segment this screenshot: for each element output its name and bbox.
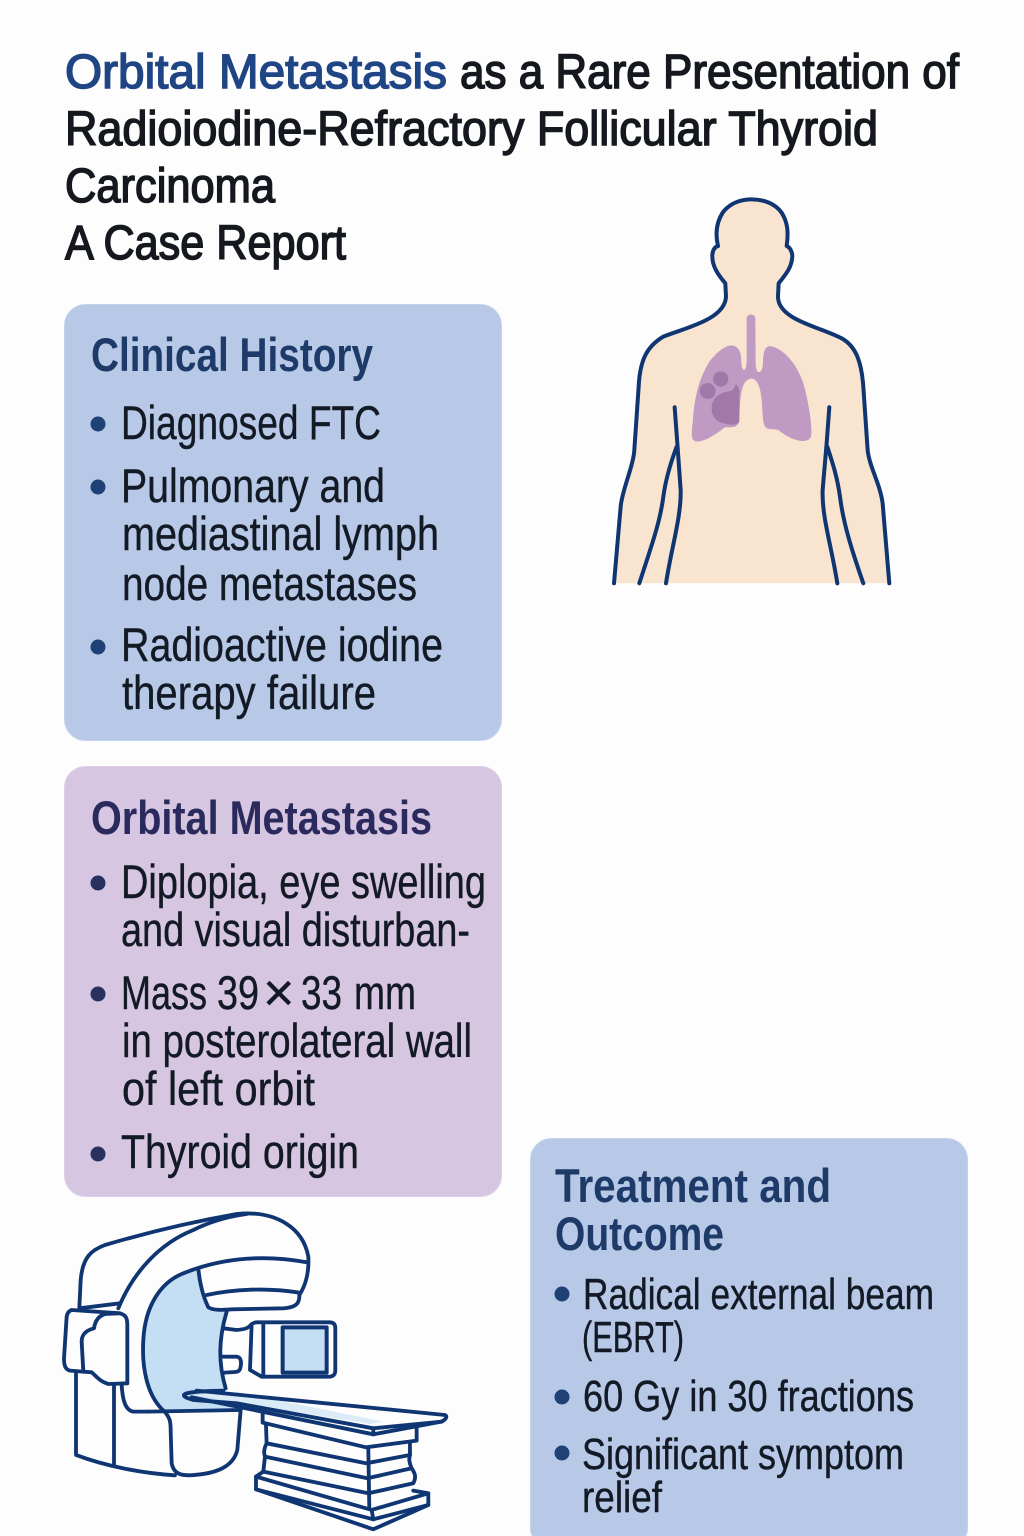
blue detector screen [283,1327,327,1373]
bullet list: clinical history: mediastinal lymph [122,507,439,560]
bullet list: clinical history: therapy failure [122,666,376,719]
bullet list: orbital metastasis: in posterolateral wall [122,1014,472,1067]
machine outline [64,1213,446,1529]
icon: radiotherapy linear accelerator [64,1213,446,1529]
bullet list: clinical history: Diagnosed FTC [121,396,381,449]
table highlight [193,1392,383,1424]
bullet list: clinical history: node metastases [122,557,417,610]
bullet list: treatment and outcome: Radical external beam [583,1270,934,1319]
bullet list: orbital metastasis: 39 [217,966,259,1019]
heading: treatment and outcome [555,1159,831,1260]
heading: clinical history: Clinical History [91,328,373,381]
bullet list: clinical history [90,396,443,719]
bullet list: orbital metastasis: Diplopia, eye swelling [121,855,486,908]
bullet list: orbital metastasis: Thyroid origin [121,1125,359,1178]
heading: treatment and outcome: Treatment and [555,1159,831,1212]
bullet list: clinical history: Radioactive iodine [121,618,443,671]
bullet list: treatment and outcome: Significant symptom [582,1430,904,1479]
bullet list: orbital metastasis: and visual disturban- [121,903,470,956]
body outline [614,199,889,583]
title: as a Rare Presentation of [460,46,960,99]
heading: orbital metastasis: Orbital Metastasis [91,791,432,844]
title [65,46,960,270]
blue bore [143,1268,237,1411]
lungs [692,315,811,442]
bullet list: orbital metastasis [90,855,486,1178]
title: Radioiodine-Refractory Follicular Thyroid [65,103,878,156]
title: Carcinoma [65,160,275,213]
panel: clinical history [64,304,502,740]
bullet list: orbital metastasis: 33 [301,966,342,1019]
title: Orbital Metastasis [65,46,447,99]
bullet list: orbital metastasis: of left orbit [122,1062,315,1115]
title: A Case Report [65,217,346,270]
bullet list: treatment and outcome: 60 Gy in 30 fractions [583,1372,914,1421]
bullet list: treatment and outcome: (EBRT) [582,1313,684,1362]
bullet list: orbital metastasis: × [263,963,295,1023]
bullet list: orbital metastasis: Mass [121,966,207,1019]
bullet list: treatment and outcome: relief [582,1473,663,1522]
bullet list: clinical history: Pulmonary and [121,459,385,512]
heading: treatment and outcome: Outcome [555,1207,724,1260]
lung tumours [700,371,739,425]
panel: orbital metastasis [64,766,502,1196]
icon: human torso with lungs [614,199,889,583]
bullet list: treatment and outcome [554,1270,934,1522]
bullet list: orbital metastasis: mm [354,966,416,1019]
torso fill [614,199,889,583]
panel: treatment and outcome [530,1138,968,1536]
